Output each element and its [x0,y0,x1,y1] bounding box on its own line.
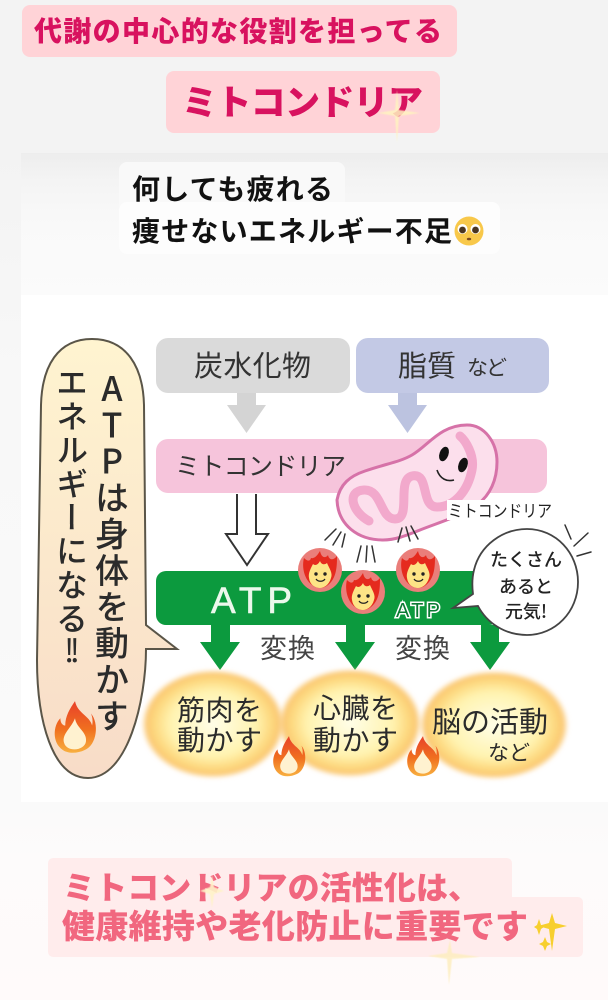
bar: ATP: ATP [211,580,292,621]
callout: plenty means energetic: たくさん [490,546,562,572]
box: lipids: 脂質 [398,343,456,385]
text block: conclusion: 健康維持や老化防止に重要です [62,900,528,948]
speech bubble: ATP moves the body [37,339,177,778]
ticks: callout [565,525,591,556]
speech bubble: ATP moves the body: ATPは身体を動かす [88,371,136,735]
illustration: mitochondrion character [337,425,497,540]
callout: plenty means energetic: あると [499,573,553,599]
box: carbohydrate: 炭水化物 [194,343,311,385]
icon: pleading face emoji [454,216,484,246]
sparkle: heading [378,90,420,142]
arrows: green conversion [200,625,510,670]
arrow: mitochondria to ATP [226,494,268,565]
label: brain activity: など [488,737,530,767]
bar: mitochondria [156,439,547,493]
text block: conclusion: ミトコンドリアの活性化は、 [63,863,480,909]
sparkle: bottom [428,940,480,985]
box: carbohydrate [156,338,350,393]
speech bubble: ATP moves the body: エネルギーになる [49,366,95,636]
text block: conclusion [48,858,583,957]
label: move muscle [177,689,262,759]
text block: fatigue [119,162,500,254]
sparkle: mid text [200,875,224,908]
callout: plenty means energetic [453,529,578,635]
icon: flame face right [396,548,440,592]
icon: flame between muscle and heart [273,736,305,776]
label: conversion right: 変換 [395,627,450,666]
label: move muscle: 筋肉を [177,689,262,729]
white diagram panel [21,295,608,802]
icon: flame face middle [341,570,385,614]
label: conversion left: 変換 [260,627,315,666]
icon: sparkles emoji [534,913,567,951]
ticks: ATP emission [325,526,418,562]
label: small ATP: ATP [396,600,440,622]
bar: mitochondria: ミトコンドリア [175,447,346,483]
speech bubble: ATP moves the body: !! [64,626,80,672]
label: brain activity [432,699,548,767]
icon: flame between heart and brain [407,736,439,776]
label: small mitochondria: ミトコンドリア [448,497,552,522]
left strip [0,153,21,803]
box: lipids: など [467,352,507,382]
box: lipids [356,338,549,393]
label: move heart: 動かす [313,719,398,759]
heading: mitochondria: ミトコンドリア [182,75,423,126]
icon: flame in bubble [55,701,96,753]
arrow: lipids down [388,393,427,433]
heading: role in metabolism: 代謝の中心的な役割を担ってる [34,10,442,50]
text block: fatigue: 何しても疲れる [132,168,333,208]
callout: plenty means energetic: 元気! [505,598,547,624]
arrow: carbohydrate down [227,393,266,433]
top image panel band [21,153,608,295]
text block: fatigue: 痩せないエネルギー不足 [132,210,452,250]
label: move heart [313,687,398,759]
bottom background [0,800,608,1000]
label: move muscle: 動かす [177,719,262,759]
label: move heart: 心臓を [313,687,398,727]
glow ellipses [142,669,568,779]
icon: flame face left [298,548,342,592]
bar: ATP [156,571,499,625]
label: brain activity: 脳の活動 [432,699,548,741]
